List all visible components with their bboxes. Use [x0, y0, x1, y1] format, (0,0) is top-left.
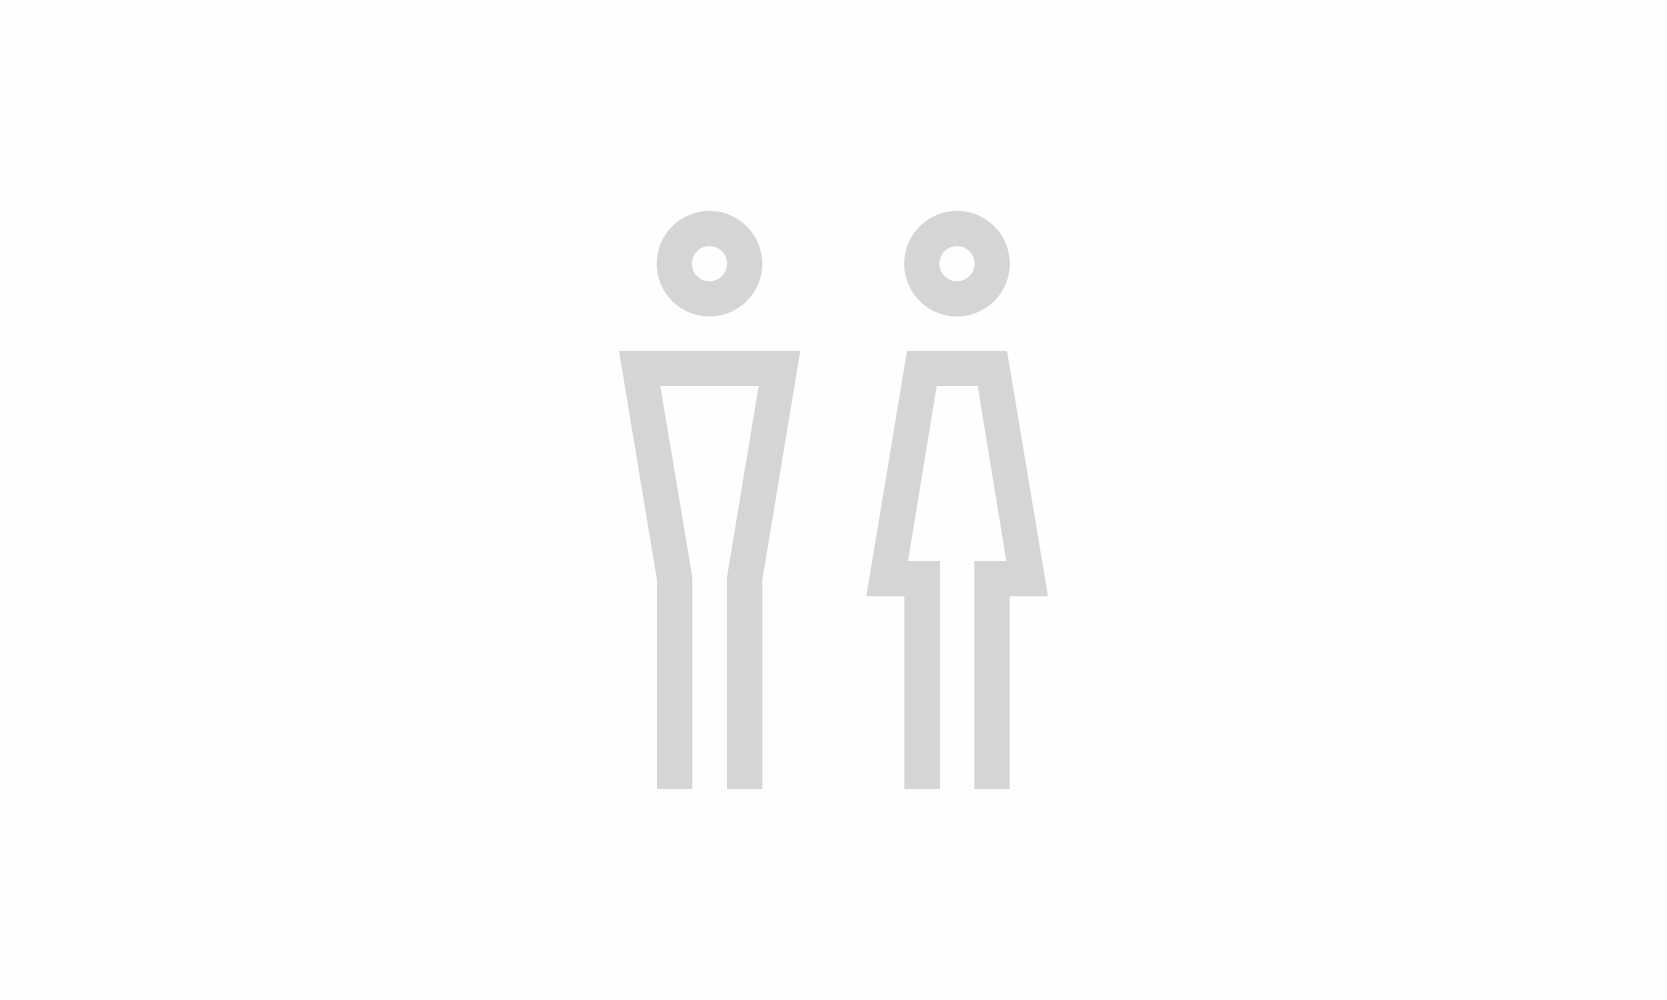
icon: man figure: [619, 229, 800, 789]
woman body outline: [866, 351, 1048, 789]
man head ring: [674, 229, 745, 299]
icon: woman figure: [866, 229, 1048, 789]
man body outline: [619, 351, 800, 789]
woman head ring: [922, 229, 992, 299]
